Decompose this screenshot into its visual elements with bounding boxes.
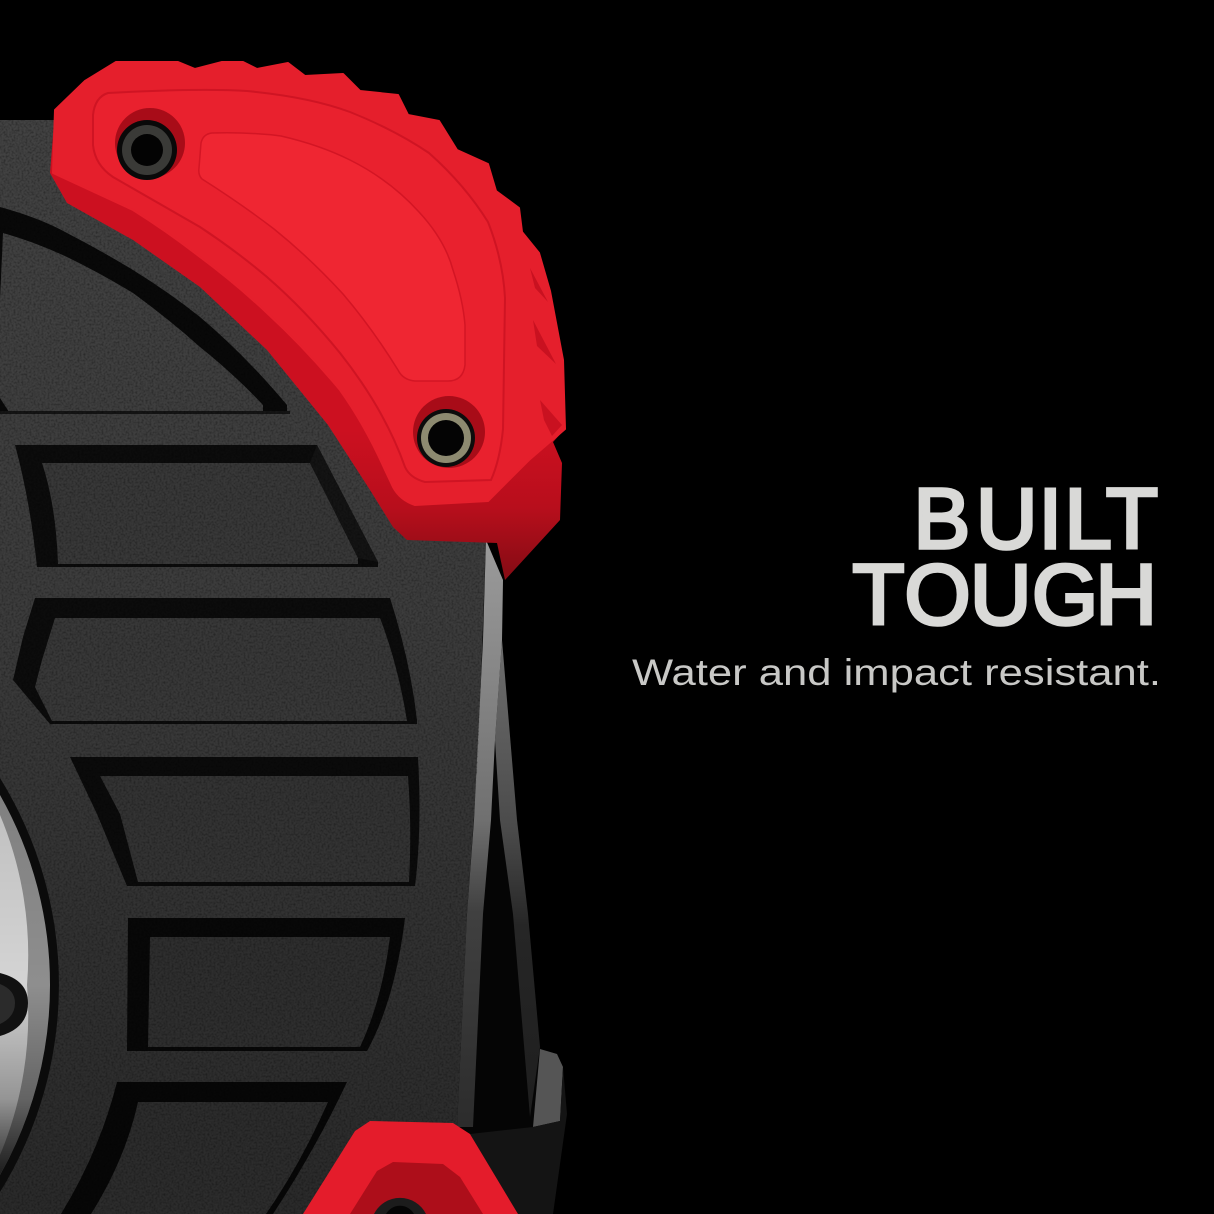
disc screw (0, 973, 28, 1036)
recessed panel 5 (61, 1082, 347, 1214)
bottom screw (413, 396, 485, 468)
title: built: BUILT (914, 472, 1158, 567)
recessed panel: top arc (0, 207, 290, 414)
recessed panel 1 (15, 445, 378, 567)
recessed panel 2 (13, 598, 417, 724)
bumper raised pad (199, 133, 465, 381)
lower screw (374, 1198, 426, 1214)
text block (632, 472, 1161, 693)
title: tough: TOUGH (852, 548, 1157, 643)
product photo: work light housing (0, 62, 567, 1214)
bumper grip ribs (530, 268, 562, 436)
bumper side wall (50, 62, 565, 580)
housing body (0, 120, 486, 1214)
recessed panel 3 (70, 757, 419, 886)
silver disc (0, 778, 59, 1192)
tagline: Water and impact resistant. (632, 652, 1161, 693)
recessed panel 4 (127, 918, 405, 1051)
top screw (115, 108, 185, 180)
bumper inset face (93, 90, 505, 482)
side plate (440, 540, 567, 1214)
light edge strip (457, 540, 503, 1127)
red corner bumper (50, 62, 565, 580)
bumper top face (53, 62, 565, 505)
body texture (0, 120, 520, 1214)
red lower bumper (303, 1121, 518, 1214)
